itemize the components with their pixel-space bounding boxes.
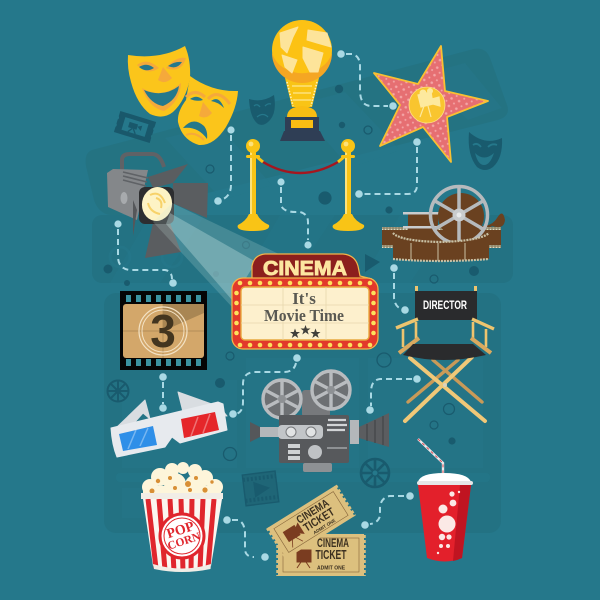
icon: rope stanchions xyxy=(238,139,364,231)
text: upper ticket: TICKET xyxy=(302,506,337,534)
heading: cinema: CINEMA xyxy=(263,258,347,280)
text: lower ticket: TICKET xyxy=(316,548,347,562)
icon: small dark film reel right xyxy=(361,459,389,487)
icon: three stars xyxy=(290,325,320,338)
spotlight beam xyxy=(153,203,281,307)
icon: small dark play film xyxy=(242,471,279,506)
icon: globe trophy xyxy=(272,20,332,141)
background clapperboard silhouette xyxy=(86,49,513,533)
text: popcorn: POP xyxy=(165,519,197,542)
icon: film strip and reel xyxy=(382,186,505,261)
icon: small dark film reel left xyxy=(108,380,128,402)
text: upper ticket: ADMIT ONE xyxy=(312,518,336,535)
icon: 3d glasses xyxy=(111,392,227,457)
number 3: 3 xyxy=(150,305,176,357)
icon: spotlight xyxy=(107,154,208,258)
text: popcorn: CORN xyxy=(166,531,203,553)
icon: countdown film frame xyxy=(120,291,207,370)
connector dots and dashed paths xyxy=(114,50,421,561)
icon: director chair xyxy=(396,286,494,421)
icon: small dark sad mask xyxy=(249,95,275,125)
text: it's movie time: It's xyxy=(292,289,316,308)
panel: cinema marquee xyxy=(232,254,378,349)
icon: cinema tickets xyxy=(268,486,364,576)
decorative dots and rings xyxy=(104,85,479,461)
icon: soda cup xyxy=(417,439,473,562)
text: director: DIRECTOR xyxy=(423,298,467,312)
icon: small dark happy mask xyxy=(469,132,502,170)
icon: sad mask xyxy=(178,76,238,145)
icon: small dark play triangle xyxy=(365,254,380,272)
icon: hollywood star xyxy=(374,46,488,162)
text: lower ticket: CINEMA xyxy=(317,536,349,550)
text: upper ticket: CINEMA xyxy=(295,497,331,527)
text: it's movie time: Movie Time xyxy=(264,306,344,325)
text: lower ticket: ADMIT ONE xyxy=(317,566,346,572)
icon: small dark ticket xyxy=(114,111,156,143)
icon: happy mask xyxy=(128,46,190,117)
icon: film projector xyxy=(250,371,389,472)
icon: popcorn bucket xyxy=(141,462,223,572)
